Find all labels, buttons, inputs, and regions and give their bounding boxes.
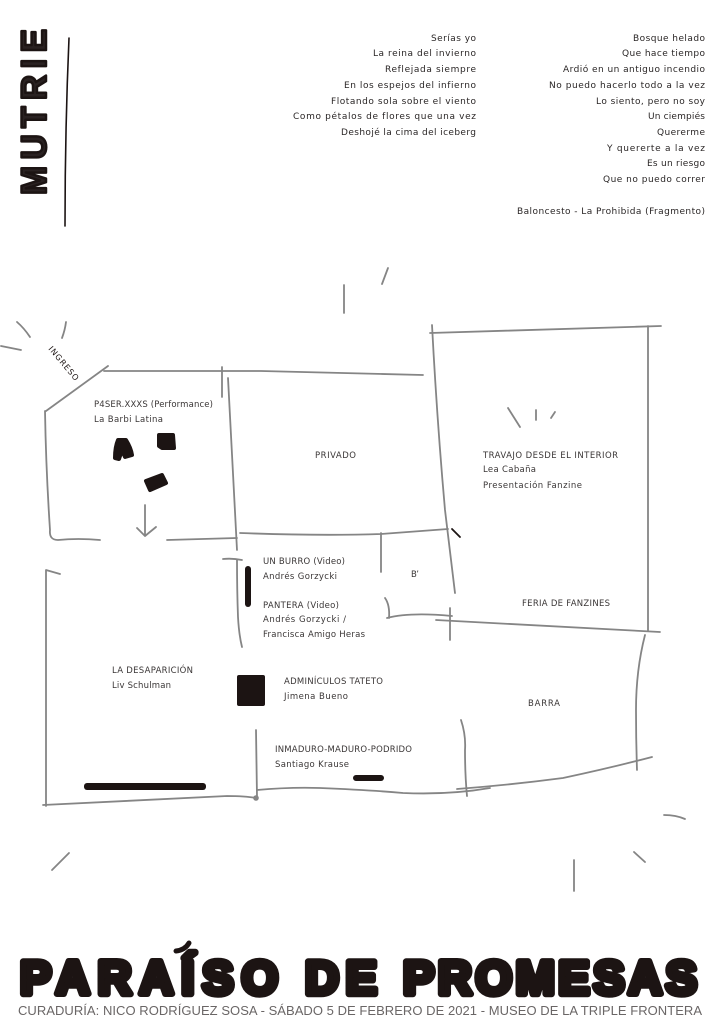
room label: la desaparicion xyxy=(112,664,193,691)
room label: travajo desde el interior: Lea Cabaña xyxy=(483,465,536,475)
poem: right column: Un ciempiés xyxy=(648,111,705,122)
poem: left column: La reina del invierno xyxy=(373,49,476,59)
poem: right column: Que hace tiempo xyxy=(622,49,705,59)
poem: left column: En los espejos del infierno xyxy=(344,81,476,91)
room label: videos: UN BURRO (Video) xyxy=(263,557,345,567)
artwork marker: adminiculos square xyxy=(237,675,265,706)
room label: inmaduro-maduro-podrido xyxy=(275,745,412,770)
room label: adminiculos tateto xyxy=(283,675,383,702)
poem: left column xyxy=(293,34,476,138)
label: ingreso: INGRESO xyxy=(46,345,80,382)
room label: videos: Andrés Gorzycki xyxy=(263,571,337,582)
room label: adminiculos tateto: ADMINÍCULOS TATETO xyxy=(284,675,383,687)
poem: left column: Como pétalos de flores que una vez xyxy=(293,111,476,122)
room label: la desaparicion: Liv Schulman xyxy=(112,681,171,691)
poem: right column: No puedo hacerlo todo a la vez xyxy=(549,81,705,91)
poem: right column xyxy=(549,34,706,185)
room label: feria de fanzines: FERIA DE FANZINES xyxy=(522,599,610,609)
poem: left column: Flotando sola sobre el viento xyxy=(331,97,476,107)
poem: left column: Deshojé la cima del iceberg xyxy=(341,127,476,138)
room label: privado: PRIVADO xyxy=(315,451,356,461)
subtitle: CURADURÍA: NICO RODRÍGUEZ SOSA - SÁBADO 5 DE FEBRERO DE 2021 - MUSEO DE LA TRIPLE FRONTERA xyxy=(18,1003,702,1018)
poem: right column: Bosque helado xyxy=(633,34,705,44)
title: PROMESAS xyxy=(403,951,697,1004)
room label: videos xyxy=(263,557,366,640)
room label: adminiculos tateto: Jimena Bueno xyxy=(283,692,348,702)
room label: travajo desde el interior: Presentación Fanzine xyxy=(483,480,582,491)
room label: videos: PANTERA (Video) xyxy=(263,601,339,611)
room label: performance xyxy=(94,400,213,425)
title: PARAÍSO xyxy=(20,951,278,1004)
sunburst ray strokes xyxy=(1,268,685,891)
floor plan: walls xyxy=(43,325,661,806)
artwork marker: desaparicion bar xyxy=(84,783,206,790)
artwork marker: performance blobs xyxy=(115,435,174,490)
plan: door tick xyxy=(452,529,460,537)
logo: Mutrie vertical wordmark: MUTRIE xyxy=(15,29,54,195)
poem credit: Baloncesto - La Prohibida (Fragmento) xyxy=(517,207,705,217)
room label: performance: La Barbi Latina xyxy=(94,415,163,425)
poem: right column: Es un riesgo xyxy=(647,159,705,169)
artwork marker: inmaduro bar xyxy=(353,775,384,781)
room label: barra: BARRA xyxy=(528,699,560,709)
vertical rule beside logo xyxy=(65,38,69,226)
room label: inmaduro-maduro-podrido: INMADURO-MADURO-PODRIDO xyxy=(275,745,412,755)
artwork marker: video bar xyxy=(245,566,251,607)
poem: right column: Y quererte a la vez xyxy=(606,144,705,154)
room label: performance: P4SER.XXXS (Performance) xyxy=(94,400,213,410)
plan: wall joint dot xyxy=(253,795,259,801)
title: DE xyxy=(305,951,377,1004)
arrow: entry direction xyxy=(137,505,156,536)
room label: B: B’ xyxy=(411,570,419,580)
room label: videos: Francisca Amigo Heras xyxy=(263,630,366,640)
poem: right column: Que no puedo correr xyxy=(603,175,705,185)
room label: travajo desde el interior xyxy=(482,451,618,491)
room label: inmaduro-maduro-podrido: Santiago Krause xyxy=(275,760,349,770)
room label: travajo desde el interior: TRAVAJO DESDE EL INTERIOR xyxy=(482,451,618,461)
poem: right column: Lo siento, pero no soy xyxy=(596,97,706,107)
room label: la desaparicion: LA DESAPARICIÓN xyxy=(112,664,193,676)
poem: right column: Ardió en un antiguo incendio xyxy=(563,64,705,75)
poem: left column: Reflejada siempre xyxy=(385,65,476,75)
title xyxy=(20,943,697,1004)
room label: videos: Andrés Gorzycki / xyxy=(263,614,346,625)
poem: right column: Quererme xyxy=(657,128,705,138)
poem: left column: Serías yo xyxy=(431,34,476,44)
